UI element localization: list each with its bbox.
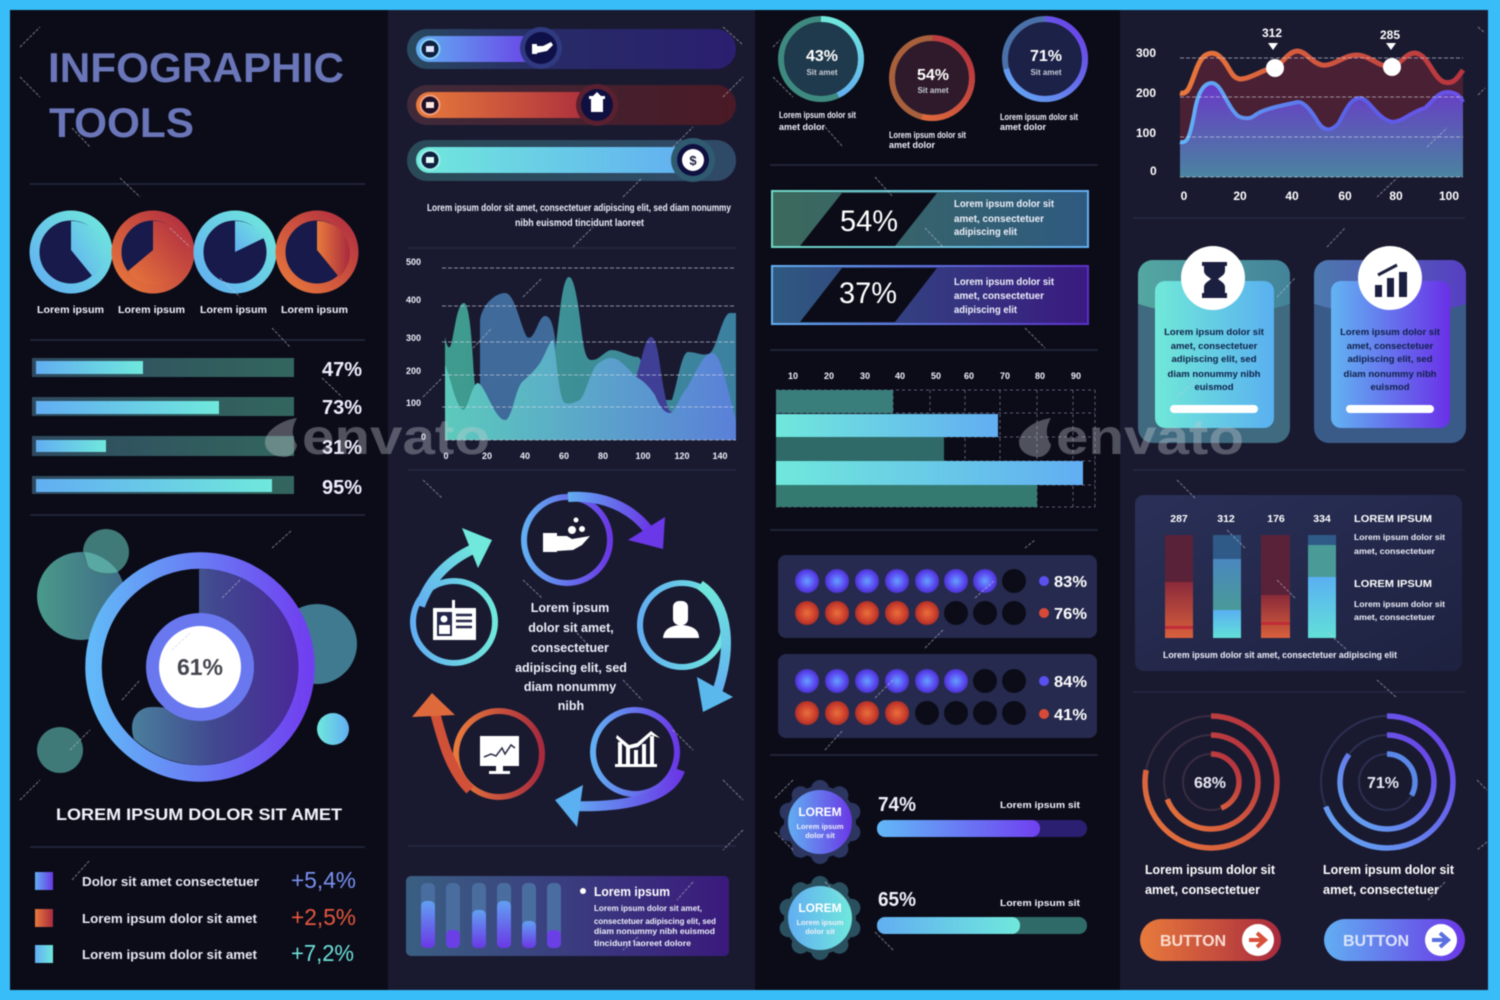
top area chart: 0 [1150,164,1157,178]
stacked bars panel: Lorem ipsum dolor sit amet, consectetuer adipiscing elit [1163,650,1397,660]
stat box 37%: 37% [839,277,897,310]
badge row 74%: LOREM [798,805,842,819]
info card teal: diam nonummy nibh [1168,369,1261,380]
horizontal bar chart: 40 [895,371,905,381]
badge row 65%: Lorem ipsum [796,918,844,927]
badge row 74%: Lorem ipsum [796,822,844,831]
radial captions: Lorem ipsum dolor sit [1323,862,1455,877]
stacked bars panel: amet, consectetuer [1354,612,1436,622]
pie labels: Lorem ipsum [281,305,348,316]
legend: +2,5% [291,904,356,930]
area chart: 20 [482,451,492,461]
donut chart: 61% [177,654,223,680]
stacked bars panel: Lorem ipsum dolor sit [1354,532,1445,542]
badge row 65% [780,876,1087,960]
watermark [265,409,1244,465]
area chart: 200 [406,366,421,376]
top area chart: 20 [1233,189,1247,203]
step 4 [412,693,542,797]
top area chart: 200 [1136,86,1156,100]
info card teal: Lorem ipsum dolor sit [1164,327,1265,338]
area chart: 80 [598,451,608,461]
mini bar panel: diam nonummy nibh euismod [594,926,715,936]
area chart: 0 [443,451,449,461]
slider blue [407,27,736,69]
pie 4 [280,216,354,288]
pie labels: Lorem ipsum [200,305,267,316]
area chart: 400 [406,295,421,305]
stat box 54%: amet, consectetuer [954,214,1044,225]
stacked bars panel: 176 [1267,513,1285,525]
mini bar panel: consectetuer adipiscing elit, sed [594,916,716,926]
icon: id card [433,600,476,640]
title: TOOLS [49,99,194,146]
cycle diagram [412,497,733,827]
horizontal bar chart: 20 [824,371,834,381]
area chart: 60 [559,451,569,461]
area chart [406,257,736,461]
stat box 54% [772,191,1088,247]
pie labels: Lorem ipsum [118,305,185,316]
top area chart: 60 [1338,189,1352,203]
stat box 54%: adipiscing elit [954,227,1018,238]
gauge 71%: Sit amet [1030,68,1062,77]
icon: growth bars [1375,265,1407,297]
watermark: envato [302,409,490,465]
gauge 71% [1000,19,1085,132]
info card purple: amet, consectetuer [1347,341,1434,352]
area chart: 140 [712,451,728,461]
dot rating panel 1: 83% [1054,574,1087,591]
gauge 54%: 54% [917,67,949,84]
area chart: 40 [520,451,530,461]
icon: monitor [480,736,519,774]
badge row 65%: 65% [878,889,916,911]
badge row 65%: dolor sit [805,927,835,936]
button blue: BUTTON [1343,933,1409,950]
top area chart: 40 [1285,189,1299,203]
radial captions: amet, consectetuer [1323,882,1439,897]
badge row 65%: LOREM [798,901,842,915]
slider teal [407,138,736,182]
horizontal bar chart: 60 [964,371,974,381]
centre text: Lorem ipsum [531,601,609,615]
gauge 54%: Sit amet [917,86,949,95]
mini bar panel [406,876,729,956]
centre text: consectetuer [531,641,609,655]
panel: column 4 [1133,28,1467,962]
area chart: 500 [406,257,421,267]
radial chart 71%: 71% [1367,775,1399,792]
radial captions [1145,862,1455,897]
stacked bars panel: LOREM IPSUM [1354,578,1432,590]
mini bar panel: Lorem ipsum dolor sit amet, [594,903,702,913]
dot rating panel 1 [778,555,1097,638]
button blue [1324,919,1465,961]
title [48,44,344,146]
stat box 37% [772,266,1088,324]
slider teal: $ [689,153,697,168]
gauge 54%: Lorem ipsum dolor sit [889,130,966,140]
legend: +5,4% [291,867,356,893]
legend: Lorem ipsum dolor sit amet [82,947,258,962]
stacked bars panel: 312 [1217,513,1235,525]
centre text: adipiscing elit, sed [515,661,627,675]
watermark: envato [1056,409,1244,465]
step 3 [555,710,680,827]
info card teal [1137,245,1291,444]
info card purple: euismod [1370,382,1410,393]
icon: person [663,601,699,638]
stacked bars panel: amet, consectetuer [1354,546,1436,556]
dot rating panel 2 [778,654,1097,738]
radial chart 68% [1145,716,1277,848]
panel: column 1 [30,44,365,966]
info card teal: adipiscing elit, sed [1172,354,1257,365]
badge row 74%: Lorem ipsum sit [1000,800,1081,811]
top area chart: 285 [1380,28,1400,42]
pie labels: Lorem ipsum [37,305,104,316]
stacked bars panel: LOREM IPSUM [1354,513,1432,525]
progress bars: 73% [322,397,362,419]
top area chart: 312 [1262,26,1282,40]
top area chart: 0 [1181,189,1188,203]
top area chart: 100 [1136,126,1156,140]
slider caption: Lorem ipsum dolor sit amet, consectetuer adipiscing elit, sed diam nonummy [427,203,731,214]
step 5 [413,528,495,663]
gauge 43%: Lorem ipsum dolor sit [779,110,856,120]
button orange: BUTTON [1160,933,1226,950]
gauge 43%: amet dolor [779,122,826,132]
area chart: 100 [406,398,421,408]
panel: column 2 [406,27,736,956]
dot rating panel 2: 84% [1054,674,1087,691]
stacked bars panel: Lorem ipsum dolor sit [1354,599,1445,609]
info card purple: diam nonummy nibh [1344,369,1437,380]
pie labels [37,305,348,316]
stacked bars panel: 334 [1313,513,1331,525]
pie 2 [116,216,190,288]
legend [35,867,356,966]
gauge 43%: 43% [806,48,838,65]
pie 3 [198,216,272,288]
legend: +7,2% [291,940,354,966]
area chart: 120 [674,451,690,461]
horizontal bar chart [776,371,1095,507]
title: INFOGRAPHIC [48,44,344,91]
slider caption: nibh euismod tincidunt laoreet [515,218,645,229]
stat box 37%: amet, consectetuer [954,291,1044,302]
gauge 54% [889,38,972,150]
donut chart [37,529,357,774]
progress bars [32,358,362,499]
area chart: 100 [635,451,651,461]
progress bars: 95% [322,477,362,499]
area chart: 300 [406,333,421,343]
stacked bars panel [1135,495,1462,671]
gauge 43%: Sit amet [806,68,838,77]
horizontal bar chart: 80 [1035,371,1045,381]
info card teal: euismod [1194,382,1234,393]
gauge 71%: Lorem ipsum dolor sit [1000,112,1078,122]
horizontal bar chart: 10 [788,371,798,381]
centre text: dolor sit amet, [528,621,614,635]
mini bar panel: tincidunt laoreet dolore [594,938,691,948]
icon: bars and line [615,731,660,767]
info card purple: adipiscing elit, sed [1348,354,1433,365]
top area chart [1136,26,1463,203]
legend: Lorem ipsum dolor sit amet [82,911,258,926]
gauge 43% [779,19,861,132]
button orange [1140,919,1281,961]
gauge 71%: 71% [1030,48,1062,65]
top area chart: 80 [1389,189,1403,203]
info card purple: Lorem ipsum dolor sit [1340,327,1441,338]
radial captions: Lorem ipsum dolor sit [1145,862,1276,877]
step 2 [640,583,733,712]
dot rating panel 2: 41% [1054,707,1087,724]
centre text: nibh [558,699,584,713]
horizontal bar chart: 50 [931,371,941,381]
radial chart 71% [1321,716,1453,848]
stat box 37%: adipiscing elit [954,305,1018,316]
slider caption [427,203,731,229]
donut caption: LOREM IPSUM DOLOR SIT AMET [56,806,342,824]
stat box 54%: Lorem ipsum dolor sit [954,199,1055,210]
icon: hand [543,518,590,552]
horizontal bar chart: 70 [1000,371,1010,381]
badge row 65%: Lorem ipsum sit [1000,898,1081,909]
top area chart: 100 [1439,189,1459,203]
centre text [515,601,627,713]
stacked bars panel: 287 [1170,513,1188,525]
step 1 [524,497,665,583]
progress bars: 31% [322,437,362,459]
badge row 74%: 74% [878,794,916,816]
slider orange [407,84,736,126]
info card purple [1313,245,1467,444]
stat box 37%: Lorem ipsum dolor sit [954,277,1055,288]
gauge 71%: amet dolor [1000,122,1047,132]
mini bar panel: Lorem ipsum [594,885,670,899]
legend: Dolor sit amet consectetuer [82,874,259,889]
stat box 54%: 54% [840,205,898,238]
area chart: 0 [421,432,426,442]
sliders [407,27,736,229]
dot rating panel 1: 76% [1054,606,1087,623]
pie 1 [34,216,108,288]
progress bars: 47% [322,359,362,381]
gauge 54%: amet dolor [889,140,936,150]
centre text: diam nonummy [524,680,616,694]
badge row 74% [780,780,1087,864]
icon: hourglass [1202,262,1227,298]
horizontal bar chart: 90 [1071,371,1081,381]
radial chart 68%: 68% [1194,775,1226,792]
top area chart: 300 [1136,46,1156,60]
panel: column 3 [770,19,1098,960]
pie charts row [34,216,354,316]
badge row 74%: dolor sit [805,831,835,840]
radial captions: amet, consectetuer [1145,882,1260,897]
horizontal bar chart: 30 [860,371,870,381]
info card teal: amet, consectetuer [1171,341,1258,352]
